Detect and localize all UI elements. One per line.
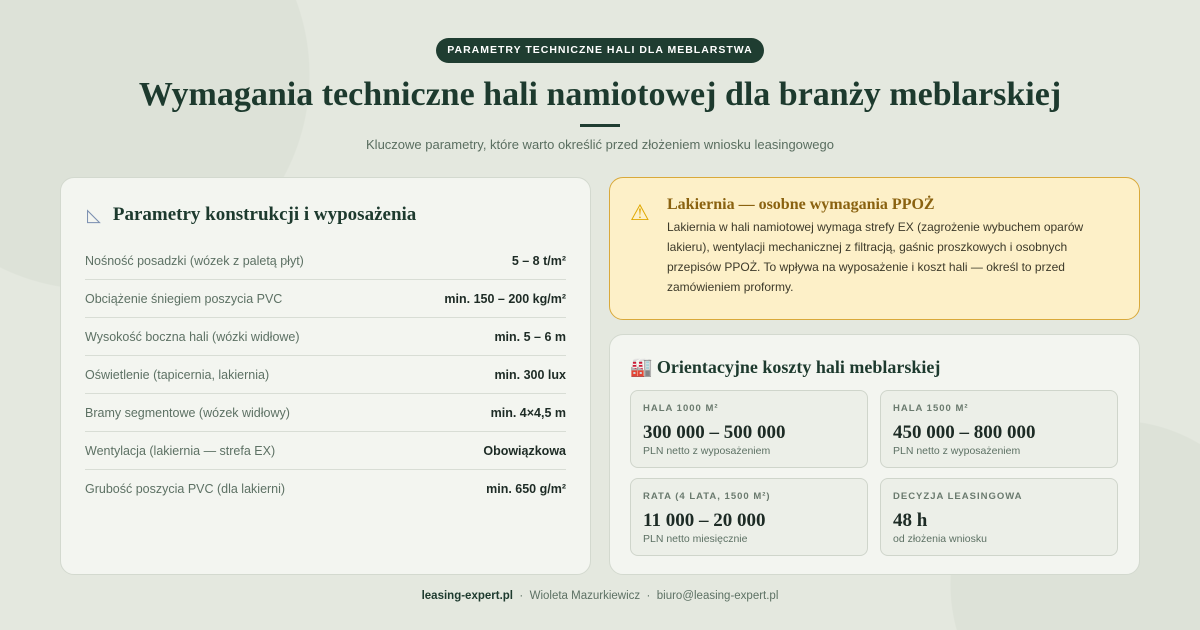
cost box: 450 000 – 800 000 (893, 422, 1036, 443)
panel: warning (609, 177, 1140, 320)
cost box: PLN netto z wyposażeniem (893, 445, 1020, 457)
icon: warning: ⚠ (630, 200, 650, 225)
parameter table: min. 4×4,5 m (491, 406, 566, 420)
heading: 🏭 Orientacyjne koszty hali meblarskiej (630, 357, 940, 377)
heading: Parametry konstrukcji i wyposażenia (113, 204, 416, 225)
cost box: 48 h (893, 510, 927, 531)
parameter table: Nośność posadzki (wózek z paletą płyt) (85, 254, 304, 268)
parameter table: min. 650 g/m² (486, 482, 566, 496)
badge: PARAMETRY TECHNICZNE HALI DLA MEBLARSTWA (447, 44, 753, 56)
cost box: DECYZJA LEASINGOWA (893, 491, 1023, 502)
cost box: od złożenia wniosku (893, 533, 987, 545)
warning text: Lakiernia — osobne wymagania PPOŻ (667, 196, 935, 213)
parameter table: min. 5 – 6 m (494, 330, 566, 344)
warning text: Lakiernia w hali namiotowej wymaga strefy EX (zagrożenie wybuchem oparów lakieru), wentylacji mechanicznej z filtracją, gaśnic proszkowych i osobnych przepisów PPOŻ. To wpływa na wyposażenie i koszt hali — określ to przed zamówieniem proformy. (667, 220, 1083, 294)
cost box (880, 390, 1118, 468)
parameter table: Obowiązkowa (483, 444, 566, 458)
cost box: HALA 1000 M² (643, 403, 719, 414)
cost box (630, 478, 868, 556)
parameter table: Wentylacja (lakiernia — strefa EX) (85, 444, 275, 458)
parameter table: min. 300 lux (494, 368, 566, 382)
parameter table (85, 254, 566, 496)
title: Wymagania techniczne hali namiotowej dla branży meblarskiej (139, 76, 1061, 113)
heading: ◺ (87, 204, 101, 224)
cost box: RATA (4 LATA, 1500 M²) (643, 491, 771, 502)
parameter table: 5 – 8 t/m² (512, 254, 566, 268)
footer: leasing-expert.pl · Wioleta Mazurkiewicz · biuro@leasing-expert.pl (422, 590, 778, 602)
parameter table: Oświetlenie (tapicernia, lakiernia) (85, 368, 269, 382)
cost box (880, 478, 1118, 556)
cost box: PLN netto z wyposażeniem (643, 445, 770, 457)
subtitle: Kluczowe parametry, które warto określić przed złożeniem wniosku leasingowego (366, 137, 834, 152)
panel: costs (609, 334, 1140, 575)
parameter table: Wysokość boczna hali (wózki widłowe) (85, 330, 300, 344)
parameter table: Bramy segmentowe (wózek widłowy) (85, 406, 290, 420)
parameter table: Obciążenie śniegiem poszycia PVC (85, 292, 282, 306)
cost box: HALA 1500 M² (893, 403, 969, 414)
badge (436, 38, 764, 63)
parameter table: min. 150 – 200 kg/m² (444, 292, 566, 306)
cost box (630, 390, 868, 468)
panel: parameters (60, 177, 591, 575)
cost box: 11 000 – 20 000 (643, 510, 765, 531)
cost box: PLN netto miesięcznie (643, 533, 747, 545)
cost box: 300 000 – 500 000 (643, 422, 786, 443)
parameter table: Grubość poszycia PVC (dla lakierni) (85, 482, 285, 496)
